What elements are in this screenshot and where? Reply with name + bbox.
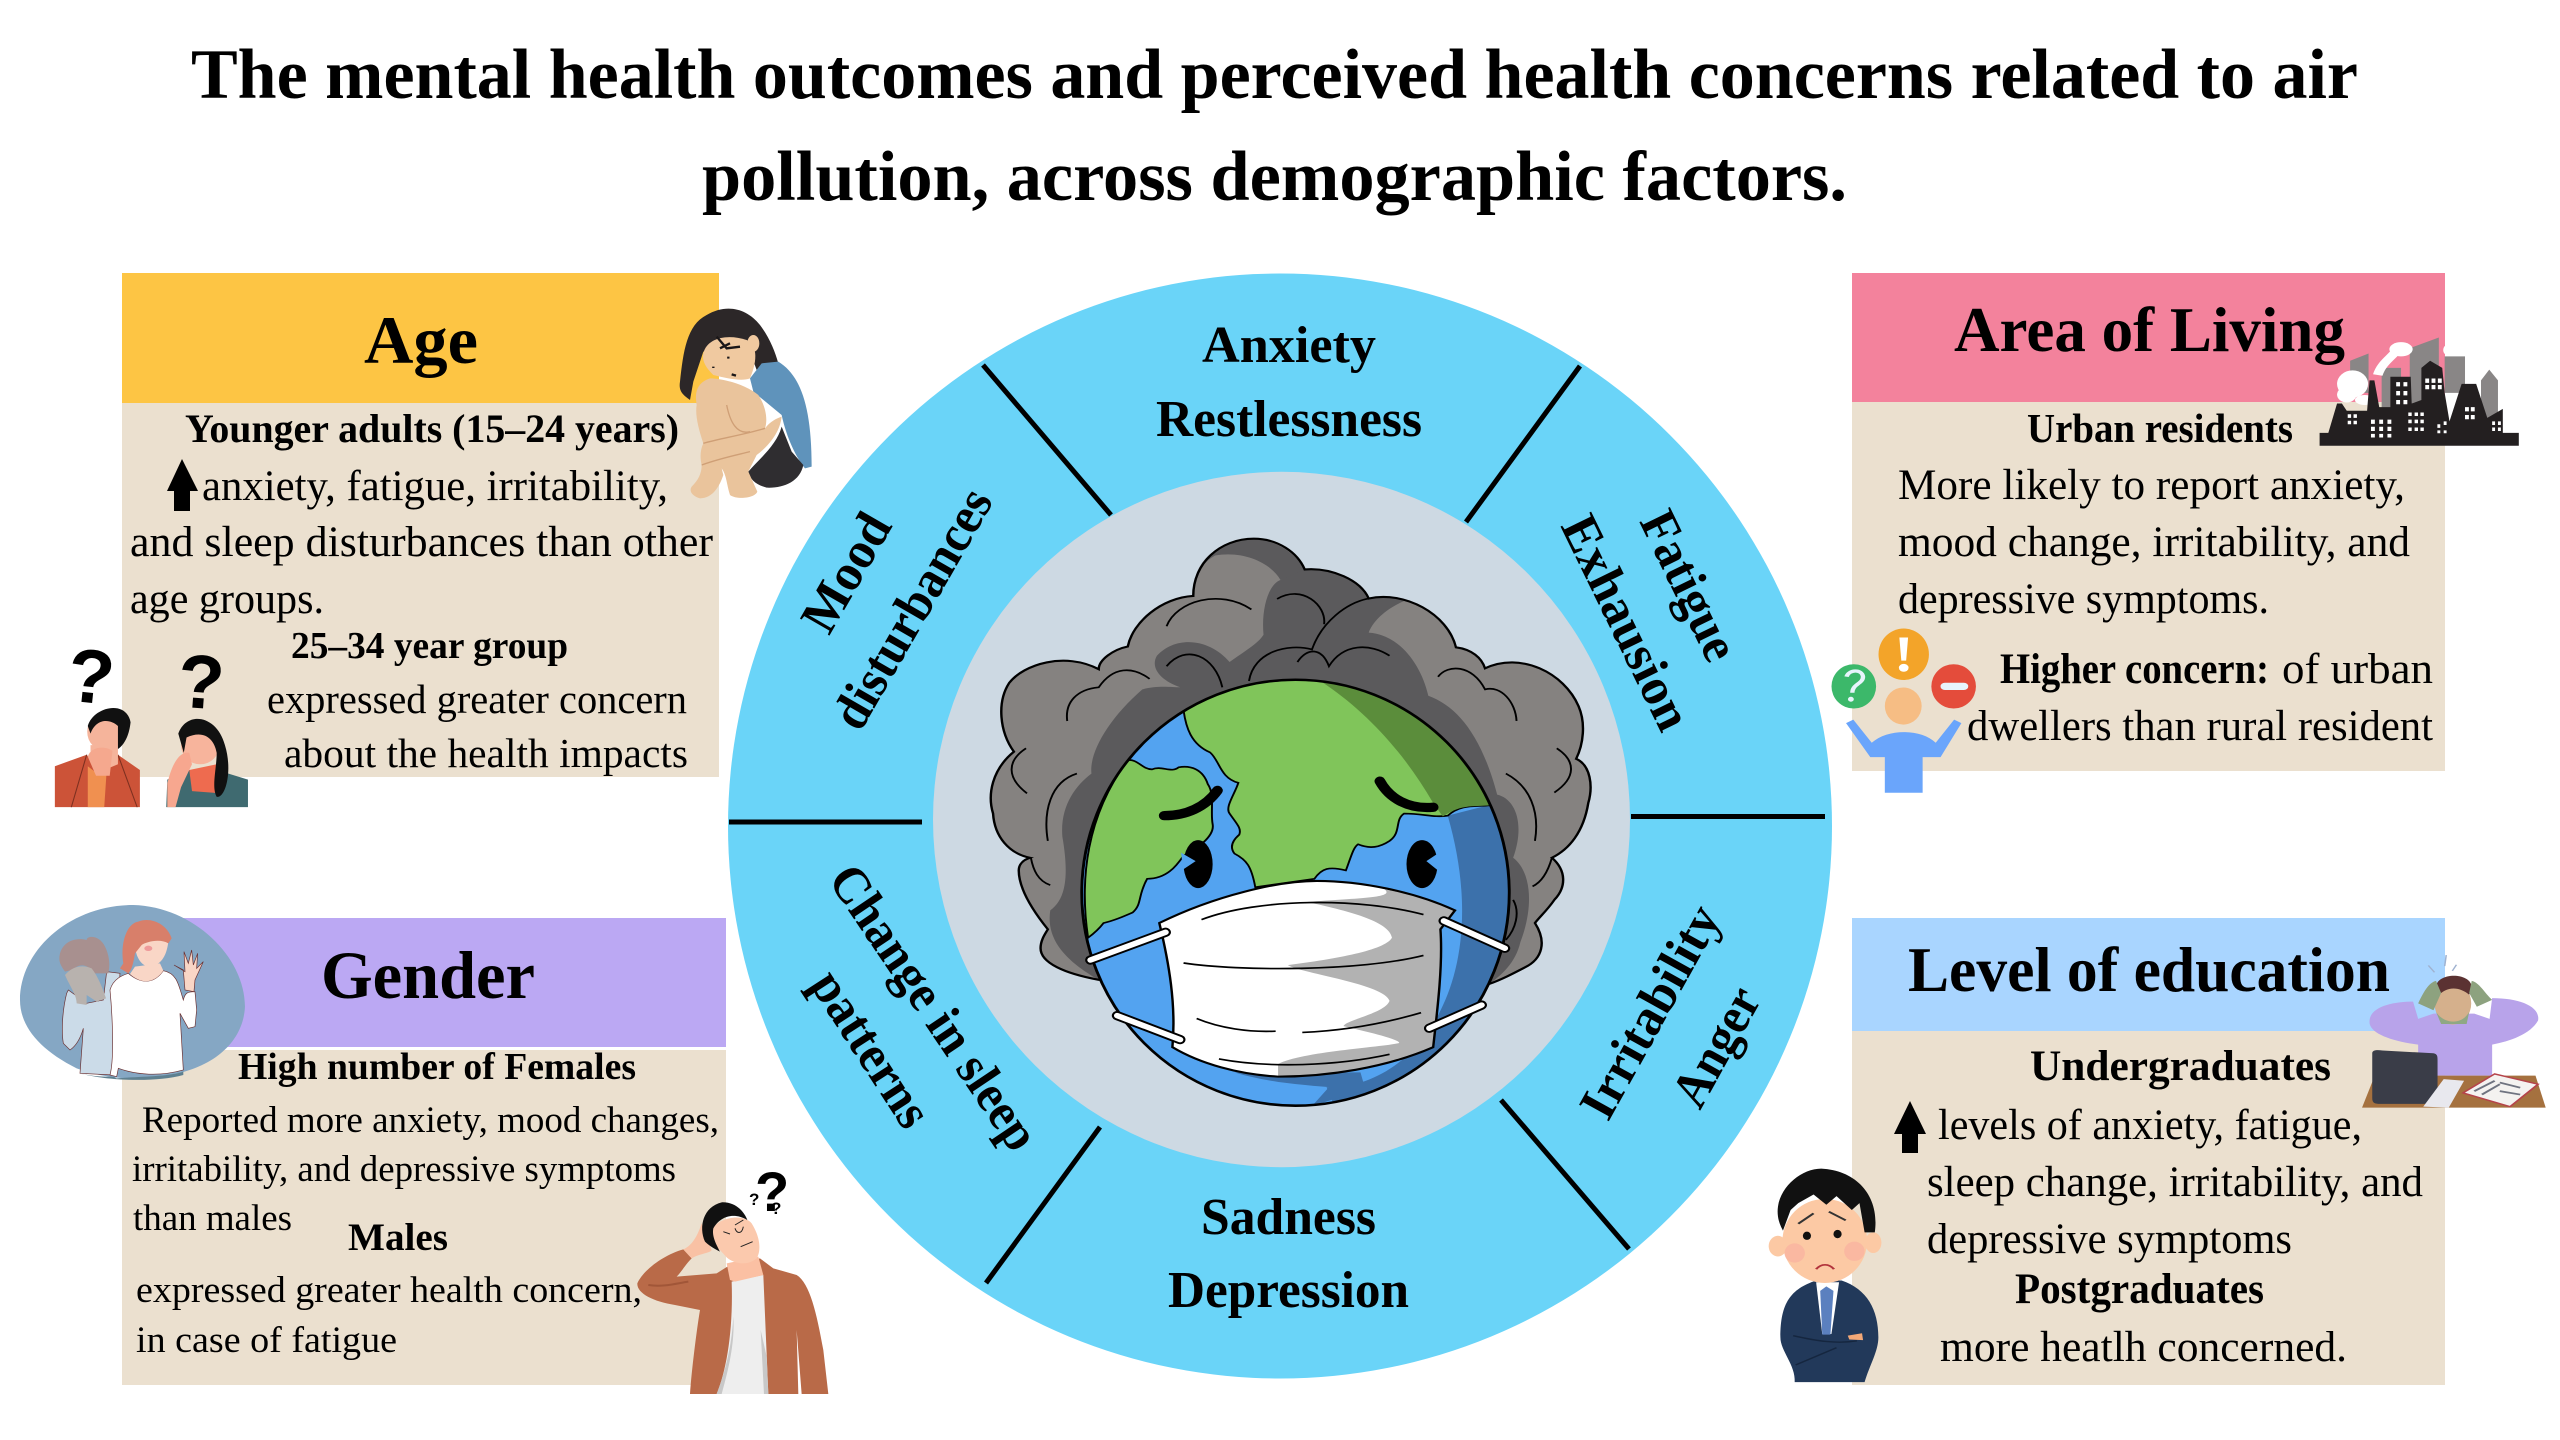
icon: thinking man in brown jacket: [637, 1202, 828, 1394]
icon: two people wondering: ?: [63, 632, 119, 722]
title: The mental health outcomes and perceived health concerns related to air: [191, 36, 2358, 114]
age header: [122, 273, 719, 403]
area header: Area of Living: [1954, 294, 2345, 365]
area body: Higher concern:: [2000, 646, 2269, 693]
education header: [1852, 918, 2445, 1031]
title: pollution, across demographic factors.: [702, 138, 1847, 216]
icon: question marks: ?: [749, 1190, 759, 1209]
segment label: anxiety: Restlessness: [1156, 391, 1422, 448]
segment label: sleep: Change in sleep: [817, 854, 1050, 1161]
area body: mood change, irritability, and: [1898, 519, 2410, 566]
area body: depressive symptoms.: [1898, 576, 2269, 623]
icon: confused person with signs: [1832, 629, 1976, 793]
icon: up arrow: [167, 459, 198, 511]
education body: more heatlh concerned.: [1940, 1324, 2347, 1371]
wheel inner disc: [933, 472, 1630, 1167]
gender header: [122, 918, 726, 1047]
panel: area of living: [1832, 273, 2519, 793]
icon: two people wondering: [55, 632, 248, 807]
face mask: [1090, 881, 1505, 1077]
age body: age groups.: [130, 576, 324, 623]
panel: gender: [20, 905, 828, 1394]
education body: [1852, 1031, 2445, 1385]
gender body: irritability, and depressive symptoms: [132, 1149, 676, 1190]
gender body: High number of Females: [238, 1046, 636, 1088]
smog cloud: [991, 539, 1591, 984]
area body: dwellers than rural resident: [1967, 703, 2433, 750]
education body: depressive symptoms: [1927, 1216, 2292, 1263]
icon: question marks: ?: [755, 1160, 789, 1223]
segment label: anxiety: [1156, 317, 1422, 448]
age body: 25–34 year group: [291, 625, 568, 667]
segment label: fatigue: Exhausion: [1549, 506, 1702, 740]
age body: about the health impacts: [284, 730, 688, 776]
panel: central wheel of mental health outcomes: [728, 274, 1832, 1378]
education body: Undergraduates: [2030, 1043, 2331, 1090]
age body: and sleep disturbances than other: [130, 519, 713, 566]
age body: expressed greater concern: [267, 676, 687, 722]
icon: up arrow: [1894, 1101, 1926, 1153]
globe: [1082, 680, 1530, 1110]
icon: two people wondering: ?: [175, 639, 227, 727]
segment label: irritability: Anger: [1661, 977, 1773, 1117]
icon: sad girl hugging knees: [680, 309, 812, 498]
gender body: Males: [348, 1216, 448, 1259]
segment label: sadness: Depression: [1168, 1262, 1409, 1319]
education body: Postgraduates: [2015, 1266, 2264, 1313]
icon: polluted city skyline: [2320, 337, 2519, 446]
gender body: in case of fatigue: [136, 1320, 397, 1361]
wheel outer ring: [728, 274, 1832, 1378]
area body: [1852, 402, 2445, 771]
segment label: irritability: Irritability: [1569, 895, 1732, 1129]
age body: anxiety, fatigue, irritability,: [202, 463, 668, 510]
area body: of urban: [2282, 646, 2433, 693]
segment label: fatigue: Fatigue: [1628, 501, 1750, 670]
icon: masked earth under smog cloud: [991, 539, 1591, 1110]
gender body: [122, 1046, 726, 1385]
segment label: sadness: [1168, 1189, 1409, 1319]
segment label: sadness: Sadness: [1201, 1189, 1376, 1246]
area header: [1852, 273, 2445, 402]
education body: sleep change, irritability, and: [1927, 1159, 2423, 1206]
gender body: Reported more anxiety, mood changes,: [142, 1100, 719, 1141]
area body: More likely to report anxiety,: [1898, 462, 2405, 509]
title: [191, 36, 2358, 216]
segment label: mood: disturbances: [821, 478, 1004, 739]
icon: stressed student at laptop: [2362, 955, 2546, 1108]
segment label: mood: Mood: [790, 503, 903, 642]
gender header: Gender: [321, 937, 535, 1013]
panel: age: [55, 273, 812, 807]
age header: Age: [364, 302, 478, 378]
face: eyes and brows: [1164, 781, 1439, 888]
gender body: than males: [133, 1198, 292, 1239]
education header: Level of education: [1908, 935, 2390, 1005]
gender body: expressed greater health concern,: [136, 1270, 642, 1311]
panel: level of education: [1769, 918, 2546, 1385]
education body: levels of anxiety, fatigue,: [1938, 1102, 2362, 1149]
icon: worried businessman: [1769, 1169, 1881, 1382]
area body: Urban residents: [2027, 405, 2293, 451]
segment label: anxiety: Anxiety: [1202, 317, 1376, 374]
age body: Younger adults (15–24 years): [185, 406, 679, 451]
icon: question marks: ?: [771, 1199, 781, 1218]
age body: [122, 403, 719, 777]
segment label: sleep: patterns: [799, 960, 943, 1138]
icon: two women in blue circle: [20, 905, 245, 1080]
